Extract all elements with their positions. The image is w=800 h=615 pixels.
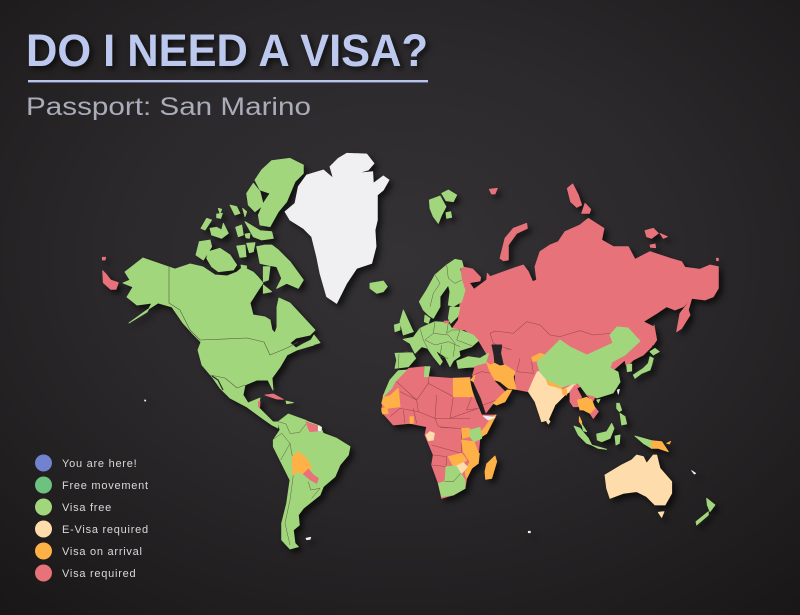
Jordan [471, 375, 475, 382]
Mauritania [382, 388, 400, 408]
New Siberian Islands [645, 228, 658, 238]
Turkey [457, 353, 492, 368]
Caspian Sea [492, 345, 504, 367]
China [537, 327, 640, 398]
Vietnam and Laos [587, 395, 598, 418]
Britain [400, 310, 413, 335]
Europe [394, 259, 492, 368]
Nepal [547, 381, 562, 388]
Korea [625, 355, 633, 365]
Greenland [285, 153, 389, 303]
North America mainland [123, 258, 315, 428]
Paraguay [303, 469, 318, 483]
India [528, 372, 576, 422]
Baltics [448, 307, 460, 323]
Somalia [480, 415, 496, 437]
title underline [28, 80, 428, 82]
Kenya [469, 427, 482, 442]
Malay peninsula [579, 417, 582, 425]
Australia and New Zealand [528, 455, 715, 533]
Iceland [370, 281, 387, 293]
Sumatra [574, 426, 592, 445]
South Africa [438, 473, 465, 497]
Denmark [424, 315, 430, 323]
subtitle: passport: Passport: San Marino [26, 93, 311, 121]
Severnaya Zemlya [567, 184, 582, 207]
Sulawesi [615, 435, 620, 445]
title: DO I NEED A VISA? [26, 25, 428, 76]
Scandinavia [419, 259, 465, 318]
Ghana [410, 417, 413, 423]
Egypt [453, 378, 473, 397]
Middle East and South Asia [471, 345, 576, 424]
legend: visa on arrival: Visa on arrival [62, 546, 143, 558]
Mozambique [465, 453, 479, 478]
Nova Scotia and Caribbean [145, 335, 320, 407]
South America [273, 414, 350, 549]
Myanmar [570, 385, 582, 407]
legend: free movement: Free movement [62, 480, 149, 492]
Iberia [395, 353, 416, 368]
Chukotka tip [103, 271, 118, 289]
Madagascar [485, 456, 497, 479]
Guyana and Suriname [306, 422, 320, 432]
Bangladesh [562, 389, 567, 395]
Zambia [448, 453, 467, 466]
legend: visa required: Visa required [62, 568, 136, 580]
legend [35, 454, 149, 582]
French Guiana [318, 426, 322, 431]
Svalbard [429, 196, 446, 223]
continental Europe [403, 322, 478, 367]
legend: visa free: Visa free [62, 502, 112, 514]
Sakhalin [653, 325, 657, 345]
Central Asia [487, 347, 540, 392]
Arabia [473, 363, 505, 413]
Eurasia red mass [429, 184, 718, 397]
Novaya Zemlya [500, 223, 527, 261]
Uganda [462, 428, 469, 438]
legend: e-visa required: E-Visa required [62, 524, 149, 536]
Ireland [394, 323, 400, 332]
Australia [605, 455, 672, 505]
Bolivia [292, 452, 312, 475]
Thailand and Cambodia [577, 397, 595, 413]
legend: you are here: You are here! [62, 458, 137, 470]
Iran [487, 362, 516, 389]
Falkland Islands [306, 537, 311, 540]
New Guinea west [635, 436, 652, 448]
Zimbabwe [456, 463, 467, 473]
Franz Josef Land [489, 188, 497, 194]
Tunisia [424, 367, 430, 377]
Arctic Canada islands [102, 153, 389, 303]
Africa [382, 367, 497, 498]
Tanzania [462, 440, 478, 457]
Oman [493, 390, 512, 405]
Papua New Guinea [652, 441, 668, 452]
world map [102, 153, 718, 549]
Tasmania [658, 512, 664, 517]
Gabon [426, 432, 434, 441]
Djibouti and Somaliland [483, 416, 495, 420]
New Zealand [707, 498, 715, 512]
East and Southeast Asia [570, 348, 671, 452]
Kyrgyzstan [532, 353, 545, 362]
Sri Lanka [547, 418, 550, 424]
Java [592, 445, 607, 449]
Kamchatka [677, 298, 692, 332]
Borneo [597, 423, 614, 442]
Japan [633, 357, 653, 378]
Senegal [382, 408, 388, 414]
Botswana [445, 466, 461, 482]
Philippines [617, 403, 622, 412]
Morocco [383, 370, 407, 397]
